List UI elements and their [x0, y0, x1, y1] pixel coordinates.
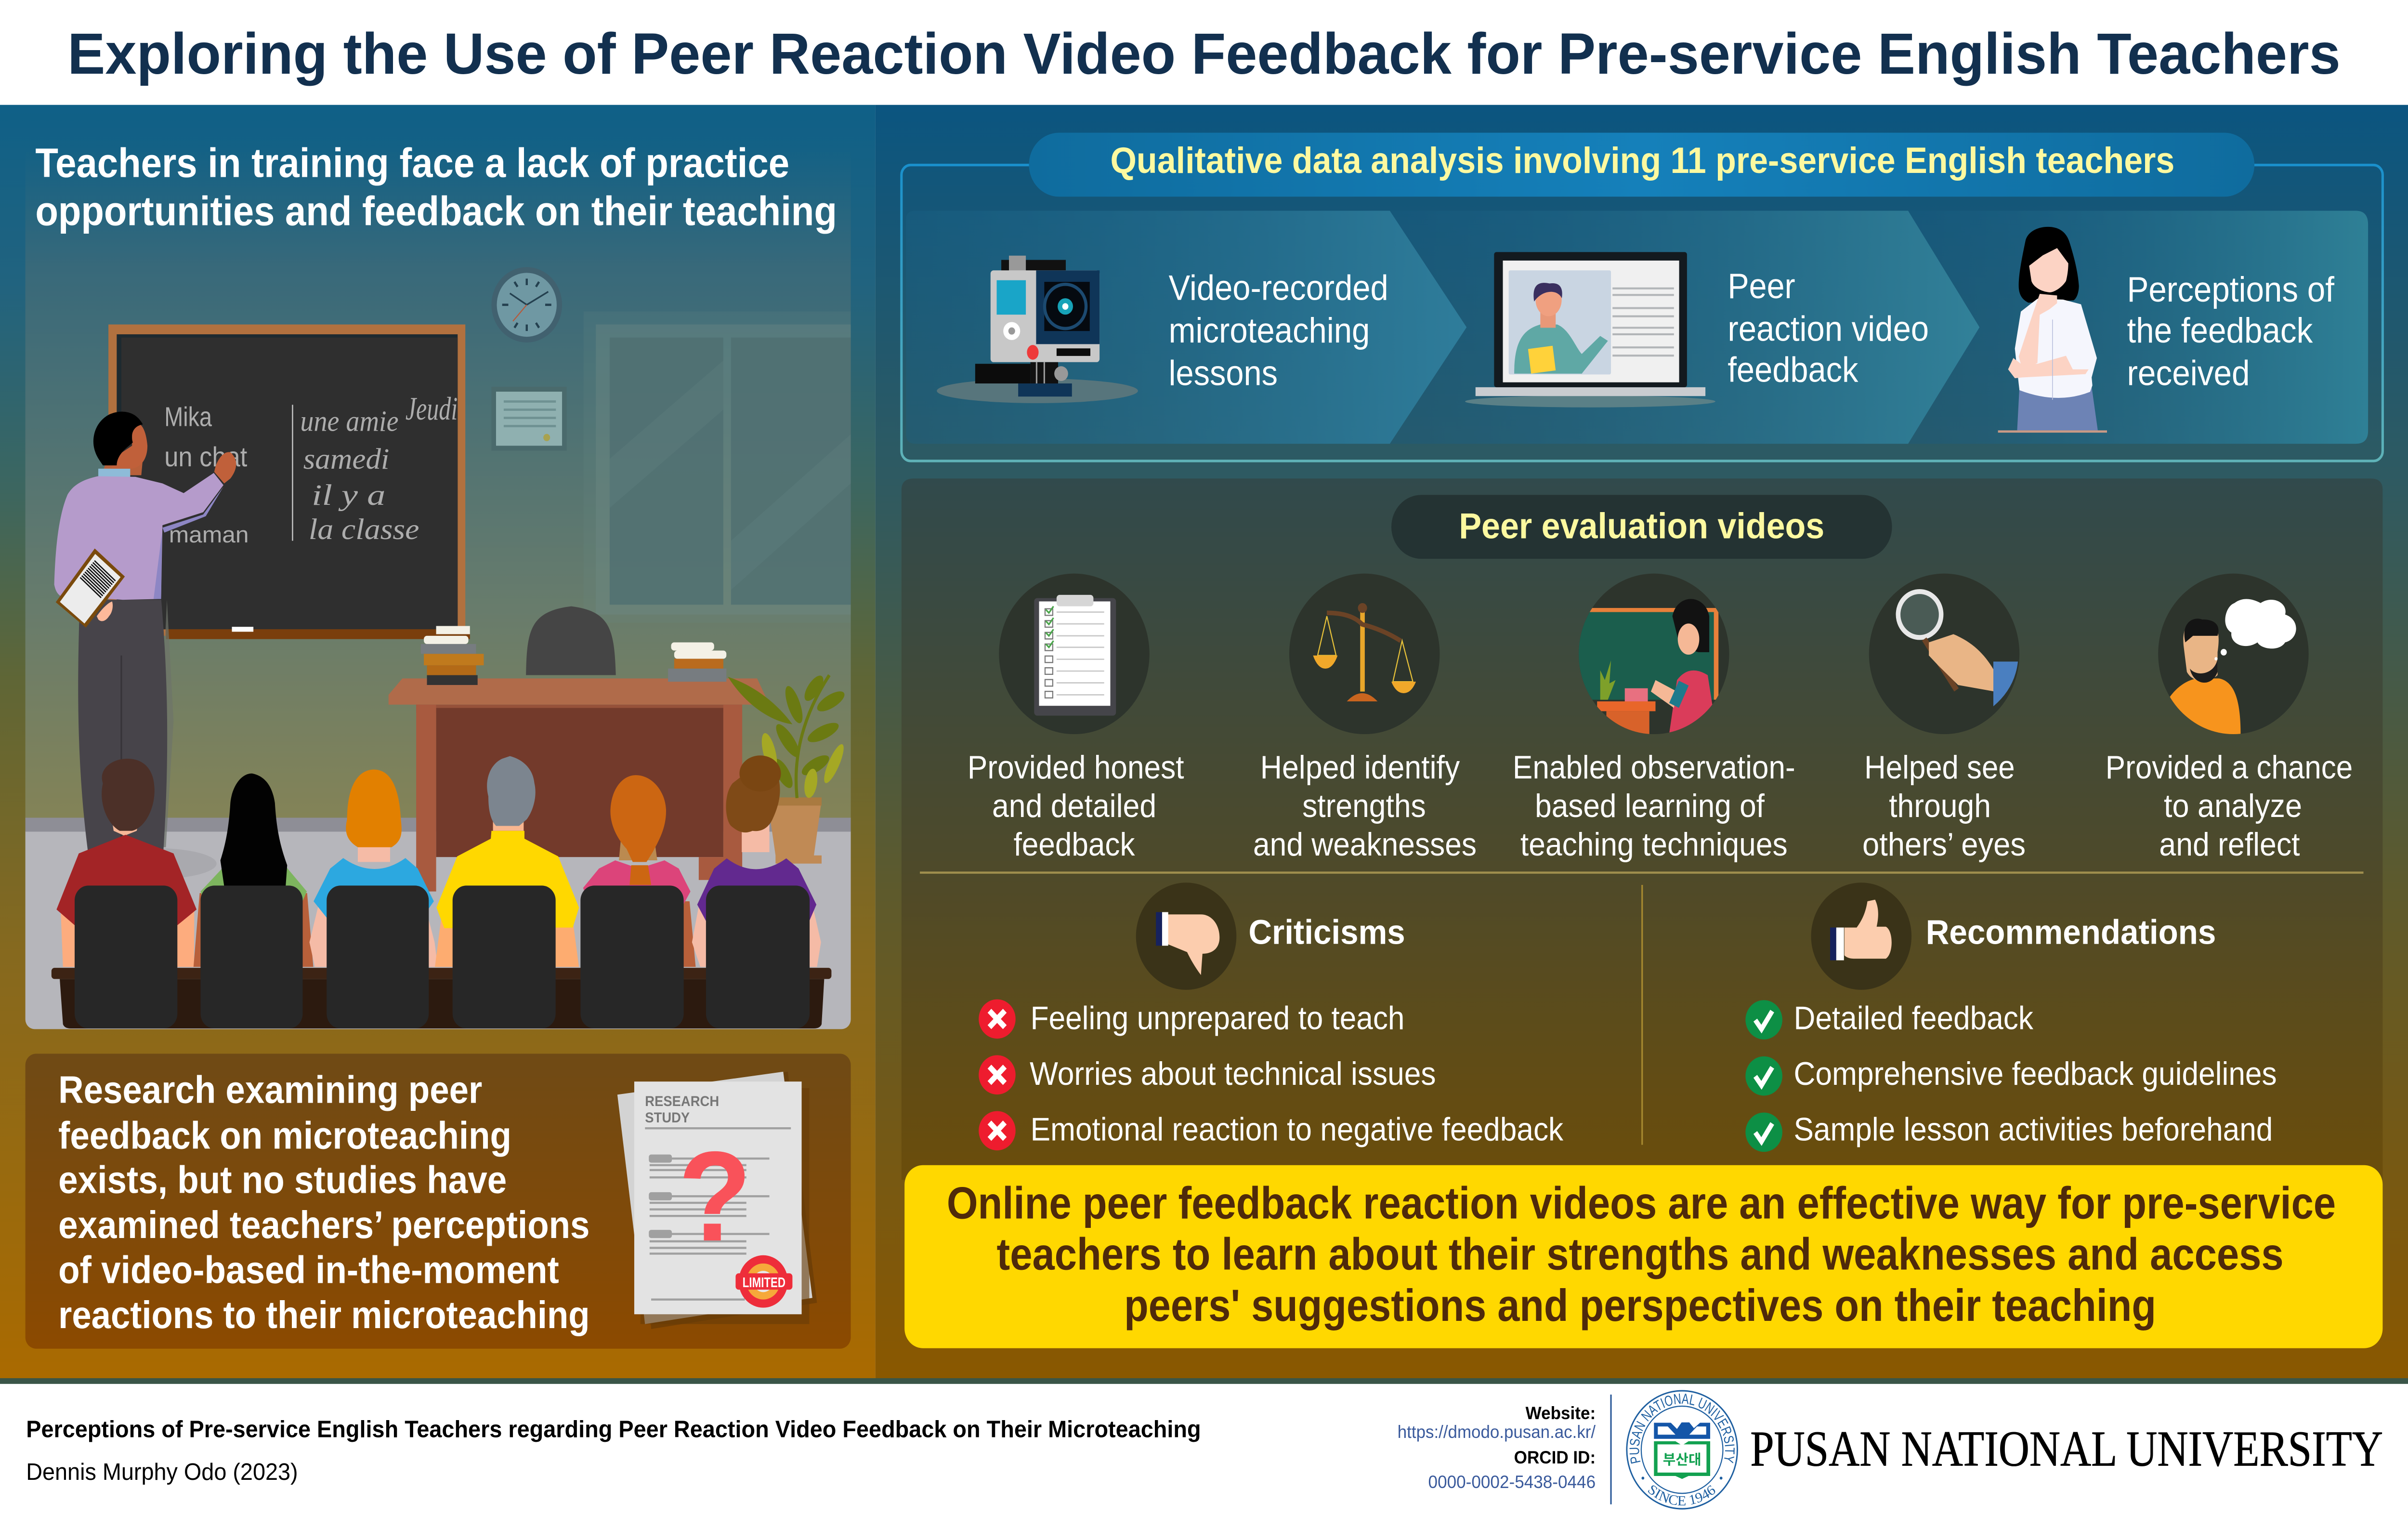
- benefit captions: others’ eyes: [1862, 826, 2026, 862]
- icon: research paper: [617, 1072, 817, 1329]
- benefit captions: to analyze: [2164, 787, 2302, 824]
- step text 1: microteaching: [1169, 311, 1370, 350]
- research gap text: exists, but no studies have: [58, 1159, 507, 1201]
- icon: thumbs up: [1811, 883, 1911, 990]
- student 2: [194, 774, 314, 967]
- certificate: [491, 387, 567, 451]
- step text 3: received: [2127, 354, 2250, 393]
- student 6: [692, 755, 821, 967]
- footer citation: Dennis Murphy Odo (2023): [26, 1459, 298, 1485]
- student 5: [583, 775, 696, 967]
- logo: university seal: 부산대: [1663, 1452, 1701, 1468]
- panel: research gap: [26, 1054, 851, 1349]
- student 4: [435, 756, 579, 967]
- benefit captions: [968, 749, 2353, 862]
- chalk writing: un chat: [164, 441, 248, 472]
- teacher desk chair: [526, 606, 616, 675]
- benefit captions: Provided a chance: [2106, 749, 2353, 785]
- callout: conclusion: [904, 1165, 2382, 1348]
- benefit captions: Provided honest: [968, 749, 1184, 785]
- title: Exploring the Use of Peer Reaction Video Feedback for Pre-service English Teachers: [67, 21, 2341, 86]
- logo: university seal: SINCE 1946: [1648, 1485, 1715, 1506]
- icon: clipboard: [1034, 595, 1116, 716]
- pill heading: [1029, 133, 2254, 197]
- benefit captions: based learning of: [1535, 787, 1765, 824]
- step text 1: Video-recorded: [1169, 269, 1388, 308]
- icon: man thinking: [2165, 599, 2296, 734]
- plant: [728, 672, 847, 864]
- teacher shadow: [91, 848, 217, 879]
- footer citation: [26, 1416, 1201, 1485]
- icon: scales: [1313, 603, 1416, 701]
- footer contact details: Website:: [1526, 1403, 1596, 1423]
- benefit captions: through: [1889, 787, 1991, 824]
- teacher: [54, 412, 236, 879]
- step text 1: lessons: [1169, 354, 1278, 393]
- window: [584, 311, 851, 623]
- callout: conclusion: peers' suggestions and perspectives on their teaching: [1124, 1280, 2156, 1331]
- chalk writing: maman: [169, 522, 249, 547]
- skirting: [26, 818, 851, 831]
- step text 2: Peer: [1727, 267, 1795, 306]
- panel: right background: [876, 105, 2408, 1380]
- icon: research paper: RESEARCH: [645, 1093, 719, 1109]
- criticism item 2: Worries about technical issues: [1030, 1055, 1436, 1092]
- chalk writing: [164, 391, 458, 547]
- panel: left background: [0, 105, 876, 1380]
- footer contact details: ORCID ID:: [1514, 1447, 1596, 1467]
- chalk writing: Mika: [164, 402, 212, 432]
- pill heading: Qualitative data analysis involving 11 pre-service English teachers: [1110, 140, 2174, 181]
- research gap text: [58, 1068, 589, 1337]
- limited stamp: [735, 1255, 792, 1308]
- icon: research paper: ?: [678, 1125, 751, 1268]
- stack of books left: [421, 626, 484, 685]
- classroom floor: [26, 831, 851, 1029]
- chalk writing: Jeudi: [406, 391, 458, 427]
- benefit captions: and reflect: [2159, 826, 2300, 862]
- research gap text: of video-based in-the-moment: [58, 1249, 559, 1291]
- benefit captions: Helped see: [1864, 749, 2015, 785]
- recommendation item 1: Detailed feedback: [1793, 999, 2034, 1036]
- icon: thinking woman: [1998, 227, 2107, 432]
- step text 2: [1727, 267, 1929, 390]
- pill heading: [1391, 495, 1892, 559]
- callout: conclusion: Online peer feedback reaction videos are an effective way for pre-service: [947, 1178, 2336, 1228]
- research gap text: feedback on microteaching: [58, 1114, 511, 1157]
- student 3: [310, 770, 438, 967]
- icon: teacher at board: [1579, 599, 1718, 734]
- left heading: Teachers in training face a lack of practice: [35, 140, 789, 186]
- left heading: [35, 140, 837, 234]
- logo: university seal: [1626, 1390, 1738, 1510]
- panel: peer evaluation: [902, 478, 2382, 1180]
- teacher desk: [389, 678, 770, 892]
- criticism item 1: Feeling unprepared to teach: [1031, 999, 1404, 1036]
- icon: laptop: [1465, 252, 1715, 408]
- footer contact details: [1398, 1403, 1596, 1492]
- step text 3: Perceptions of: [2127, 270, 2334, 309]
- recommendation item 3: Sample lesson activities beforehand: [1793, 1111, 2273, 1147]
- process arrows: [906, 211, 2368, 444]
- logo: university seal: PUSAN NATIONAL UNIVERSITY: [1630, 1393, 1735, 1463]
- panel: classroom illustration: [26, 147, 851, 1029]
- clipboard: [56, 549, 125, 628]
- callout: conclusion: teachers to learn about their strengths and weaknesses and access: [997, 1229, 2284, 1279]
- criticisms heading: Criticisms: [1248, 912, 1405, 951]
- chalk writing: la classe: [309, 513, 419, 546]
- step text 2: reaction video: [1727, 310, 1929, 349]
- limited stamp: LIMITED: [743, 1275, 785, 1290]
- pill heading: Peer evaluation videos: [1459, 506, 1824, 546]
- step text 1: [1169, 269, 1388, 393]
- chalk writing: il y a: [312, 478, 385, 511]
- benefit captions: teaching techniques: [1520, 826, 1788, 862]
- recommendations heading: Recommendations: [1926, 912, 2216, 951]
- left heading: opportunities and feedback on their teaching: [35, 188, 837, 234]
- benefit captions: and weaknesses: [1253, 826, 1477, 862]
- step text 3: the feedback: [2127, 311, 2313, 350]
- student benches: [52, 885, 831, 1028]
- classroom wall: [26, 147, 851, 819]
- footer contact details: 0000-0002-5438-0446: [1428, 1472, 1596, 1492]
- benefit captions: Enabled observation-: [1513, 749, 1795, 785]
- benefit captions: Helped identify: [1260, 749, 1460, 785]
- stack of books right: [668, 643, 726, 682]
- blackboard: [108, 325, 470, 639]
- footer band: [0, 1378, 2408, 1384]
- benefit captions: strengths: [1302, 787, 1426, 824]
- research gap text: reactions to their microteaching: [58, 1294, 589, 1337]
- recommendations column: [1745, 883, 2277, 1152]
- clock: [491, 267, 562, 343]
- chalk writing: une amie: [300, 405, 398, 437]
- chalk writing: samedi: [303, 442, 389, 475]
- icon: magnifying glass and hand: [1898, 592, 2018, 706]
- research gap text: examined teachers’ perceptions: [58, 1204, 589, 1247]
- step text 2: feedback: [1727, 351, 1858, 390]
- footer contact details: https://dmodo.pusan.ac.kr/: [1398, 1422, 1596, 1442]
- icon circles row: [999, 574, 2309, 734]
- icon: thumbs down: [1136, 883, 1236, 990]
- icon: research paper: STUDY: [645, 1110, 690, 1126]
- recommendation item 2: Comprehensive feedback guidelines: [1793, 1055, 2277, 1092]
- criticism item 3: Emotional reaction to negative feedback: [1031, 1111, 1564, 1147]
- student 1: [56, 759, 196, 967]
- research gap text: Research examining peer: [58, 1068, 482, 1111]
- footer citation: Perceptions of Pre-service English Teachers regarding Peer Reaction Video Feedback on Their Microteaching: [26, 1416, 1201, 1443]
- icon: video camera: [937, 256, 1138, 403]
- panel: qualitative analysis: [902, 133, 2382, 461]
- benefit captions: and detailed: [992, 787, 1156, 824]
- criticisms column: [979, 883, 1564, 1150]
- benefit captions: feedback: [1014, 826, 1135, 862]
- step text 3: [2127, 270, 2334, 393]
